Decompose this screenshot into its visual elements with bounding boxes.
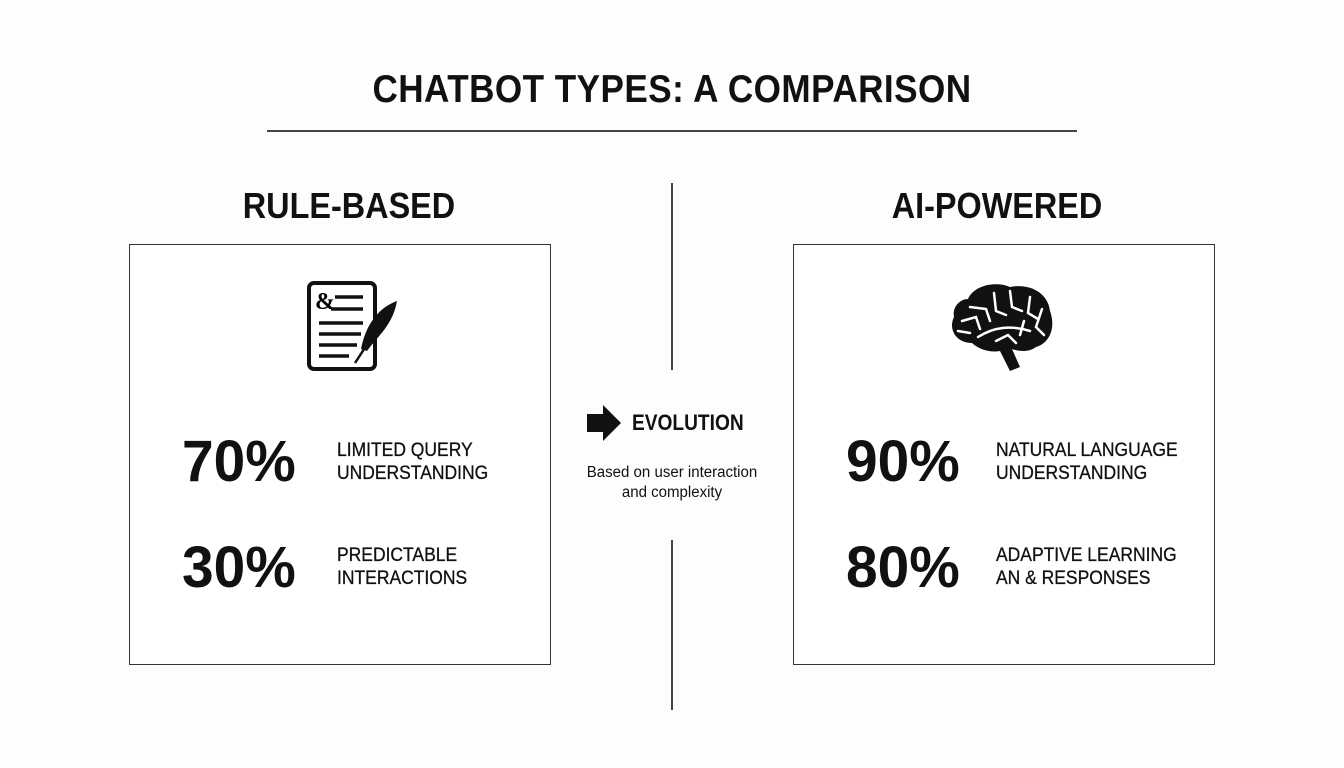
text: evolution note: Based on user interaction <box>587 464 757 481</box>
text: evolution note <box>587 464 757 501</box>
panel: rule-based <box>129 244 551 665</box>
label: predictable: INTERACTIONS <box>337 568 467 589</box>
heading: rule-based: RULE-BASED <box>243 185 455 226</box>
icon: brain <box>952 284 1052 371</box>
label: predictable: PREDICTABLE <box>337 545 457 566</box>
title: CHATBOT TYPES: A COMPARISON <box>372 68 972 111</box>
label: natural language: UNDERSTANDING <box>996 463 1147 484</box>
label: adaptive learning: AN & RESPONSES <box>996 568 1150 589</box>
label: predictable <box>337 545 467 589</box>
heading: ai-powered: AI-POWERED <box>892 185 1102 226</box>
label: adaptive learning: ADAPTIVE LEARNING <box>996 545 1177 566</box>
label: adaptive learning <box>996 545 1177 589</box>
label: natural language: NATURAL LANGUAGE <box>996 440 1178 461</box>
arrow: evolution <box>587 405 621 441</box>
icon: document with quill <box>307 281 397 371</box>
stat: 70%: 70% <box>182 429 296 494</box>
text: evolution note: and complexity <box>622 484 722 501</box>
label: limited query: UNDERSTANDING <box>337 463 488 484</box>
icon: document with quill: & <box>315 289 335 315</box>
label: evolution: EVOLUTION <box>632 410 744 435</box>
stat: 30%: 30% <box>182 535 296 600</box>
panel: ai-powered <box>793 244 1215 665</box>
stat: 90%: 90% <box>846 429 960 494</box>
label: natural language <box>996 440 1178 484</box>
label: limited query: LIMITED QUERY <box>337 440 473 461</box>
stat: 80%: 80% <box>846 535 960 600</box>
label: limited query <box>337 440 488 484</box>
